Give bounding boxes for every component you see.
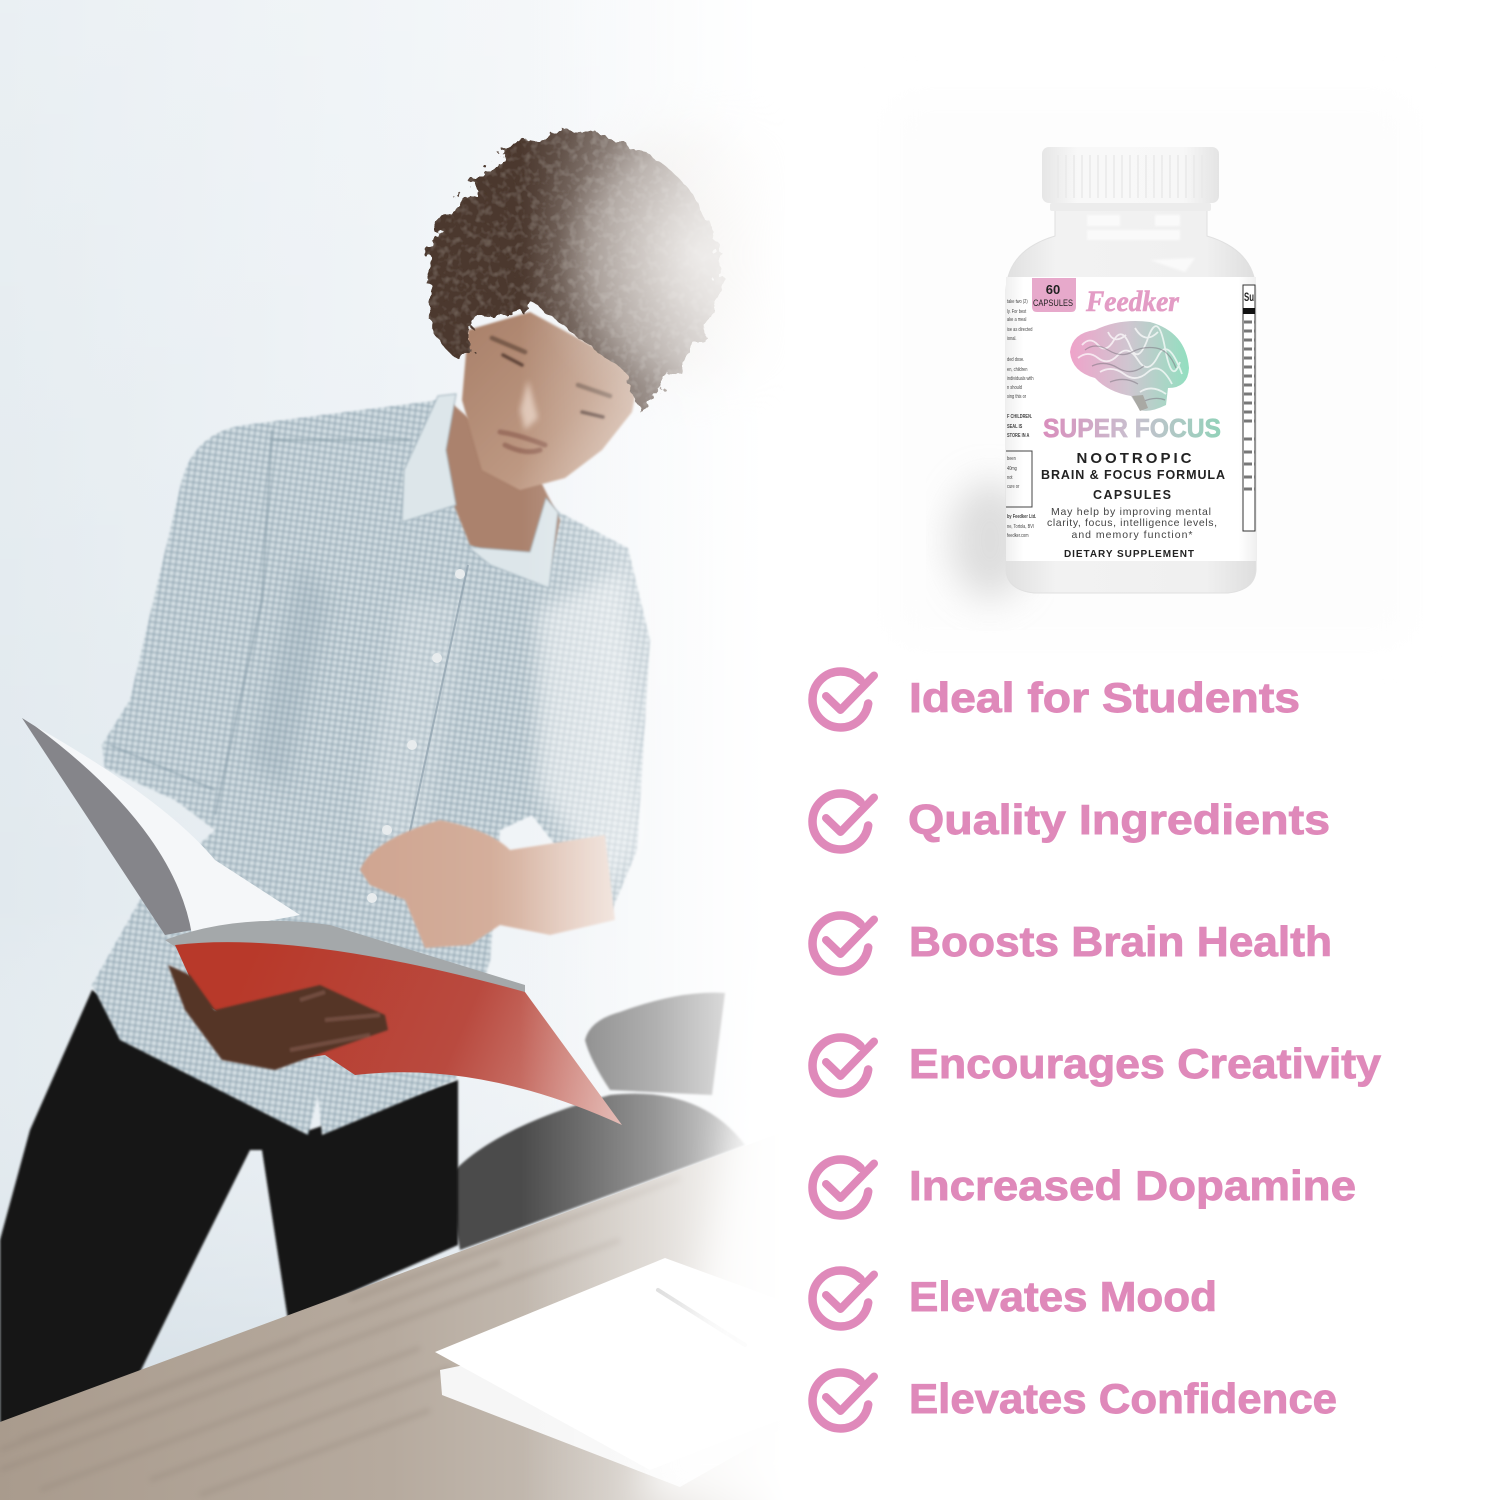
sleeve seam — [110, 430, 410, 815]
left side label text: take two (2) — [1007, 298, 1028, 305]
nose highlight — [520, 380, 538, 430]
product title: SUPER FOCUS — [1043, 413, 1221, 443]
white fade overlays — [520, 0, 885, 1500]
shirt collar — [402, 394, 558, 588]
capsule count badge: CAPSULES — [1033, 298, 1073, 308]
left side label text: en, children — [1007, 366, 1028, 373]
table — [0, 1133, 780, 1500]
benefit: Elevates Confidence — [812, 1372, 1337, 1428]
brain illustration — [1070, 321, 1189, 411]
right hand and forearm — [360, 820, 615, 948]
supplement facts panel: Su — [1244, 290, 1254, 304]
left side label text: 40mg — [1007, 465, 1017, 472]
left side label box — [1006, 451, 1032, 507]
benefit: Quality Ingredients: Quality Ingredients — [908, 796, 1330, 843]
left side label text: been — [1007, 455, 1016, 462]
bottle body — [1006, 210, 1256, 593]
benefit: Increased Dopamine: Increased Dopamine — [909, 1162, 1356, 1209]
brand name: Feedker — [1085, 285, 1179, 318]
benefit: Elevates Mood: Elevates Mood — [909, 1273, 1217, 1320]
book cover — [165, 921, 622, 1125]
neck — [440, 400, 560, 575]
benefit: Encourages Creativity — [812, 1038, 1382, 1094]
bottle neck highlights — [1087, 215, 1195, 272]
left side label text: not — [1007, 474, 1013, 481]
facial features — [492, 338, 610, 452]
product description — [1041, 450, 1225, 560]
bottle cap — [1042, 147, 1219, 211]
product description: NOOTROPIC — [1076, 450, 1192, 467]
benefit: Boosts Brain Health: Boosts Brain Health — [909, 918, 1332, 965]
product description: BRAIN & FOCUS FORMULA — [1041, 468, 1225, 482]
supplement facts panel — [1243, 285, 1255, 531]
shirt — [92, 400, 650, 1135]
shirt shading — [250, 560, 640, 890]
product description: DIETARY SUPPLEMENT — [1064, 549, 1194, 560]
wall background — [0, 0, 800, 1500]
left side label text: n should — [1007, 384, 1022, 391]
bottle backdrop and shadow — [890, 100, 1410, 640]
left side label text — [1007, 298, 1036, 539]
papers and pen — [435, 1258, 780, 1487]
left hand — [168, 965, 388, 1070]
left side label text: ly. For best — [1007, 308, 1027, 315]
product description: CAPSULES — [1093, 488, 1171, 502]
open book pages — [22, 718, 300, 935]
capsule count badge: 60 — [1046, 282, 1060, 297]
product description: clarity, focus, intelligence levels, — [1047, 517, 1217, 529]
left side label text: ne, Tortola, BVI — [1007, 523, 1034, 530]
left side label text: ded dose. — [1007, 356, 1024, 363]
left side label text: STORE IN A — [1007, 432, 1030, 439]
product bottle — [890, 100, 1410, 640]
trousers — [0, 990, 458, 1425]
capsule count badge — [1032, 278, 1076, 312]
left side label text: by Feedker Ltd. — [1007, 513, 1036, 520]
left side label text: cure or — [1007, 483, 1020, 490]
benefit: Ideal for Students — [812, 672, 1300, 728]
left side label text: ake a meal — [1007, 316, 1026, 323]
benefit: Encourages Creativity: Encourages Creativity — [909, 1040, 1382, 1087]
product description: May help by improving mental — [1051, 506, 1211, 518]
benefit: Elevates Mood — [812, 1270, 1217, 1326]
benefit: Elevates Confidence: Elevates Confidence — [909, 1375, 1337, 1422]
left side label text: ise as directed — [1007, 326, 1033, 333]
benefit: Increased Dopamine — [812, 1160, 1356, 1216]
left side label text: sing this or — [1007, 393, 1026, 400]
chair — [454, 993, 745, 1250]
left side label text: feedker.com — [1007, 532, 1029, 539]
benefits list — [812, 672, 1382, 1428]
shirt placket and buttons — [367, 565, 468, 903]
benefit: Ideal for Students: Ideal for Students — [909, 674, 1300, 721]
left side label text: F CHILDREN. — [1007, 413, 1032, 420]
face — [462, 312, 640, 490]
left side label text: SEAL IS — [1007, 423, 1022, 430]
product description: and memory function* — [1072, 529, 1192, 541]
benefit: Boosts Brain Health — [812, 916, 1332, 972]
curly hair — [430, 75, 880, 435]
benefit: Quality Ingredients — [812, 794, 1330, 850]
left side label text: individuals with — [1007, 375, 1034, 382]
photo: student reading a book — [0, 0, 885, 1500]
left side label text: ional. — [1007, 335, 1016, 342]
shirt fabric — [92, 400, 650, 1135]
bottle label — [1006, 277, 1256, 561]
